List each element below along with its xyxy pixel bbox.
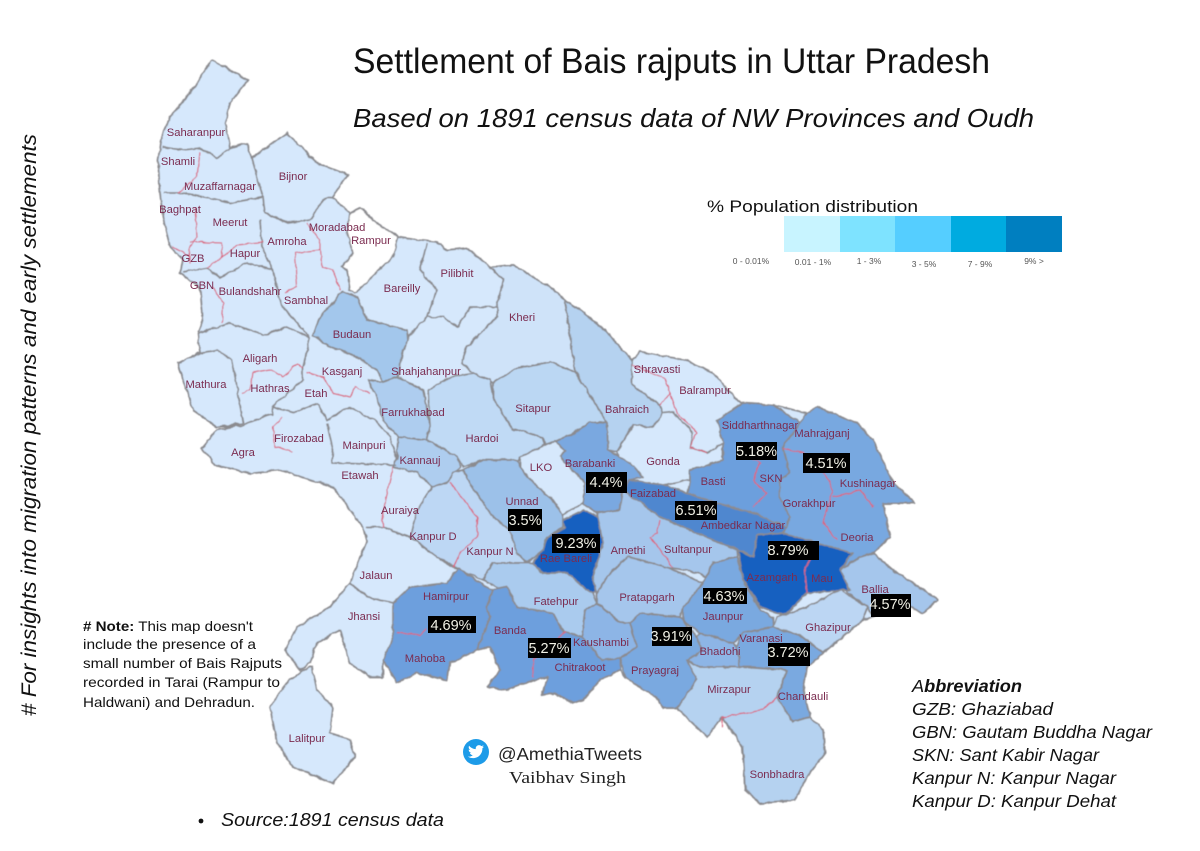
percentage callouts (428, 442, 911, 666)
district name labels: Bhadohi (699, 646, 741, 658)
abbreviation list: Kanpur D: Kanpur Dehat (912, 791, 1117, 811)
district name labels: Balrampur (679, 385, 731, 397)
district name labels: Mau (811, 573, 833, 585)
district name labels: Chitrakoot (554, 662, 606, 674)
district name labels: Gorakhpur (783, 498, 836, 510)
percentage callouts: 5.18% (736, 444, 777, 460)
district name labels: Budaun (333, 329, 371, 341)
percentage callouts: 9.23% (555, 536, 597, 552)
district name labels: Siddharthnagar (722, 420, 799, 432)
district name labels: Fatehpur (534, 596, 579, 608)
subtitle: Based on 1891 census data of NW Provinces and Oudh (353, 103, 1034, 133)
district name labels: GBN (190, 280, 214, 292)
district name labels: Unnad (506, 496, 538, 508)
map note: small number of Bais Rajputs (83, 655, 282, 671)
district name labels: Mahoba (405, 653, 446, 665)
percentage callouts: 3.91% (650, 629, 692, 645)
district name labels: Rae Bareli (540, 553, 592, 565)
author name: Vaibhav Singh (509, 768, 627, 787)
legend swatches (784, 216, 1062, 252)
abbreviation list: SKN: Sant Kabir Nagar (912, 745, 1100, 765)
district name labels: Shahjahanpur (391, 366, 461, 378)
legend labels (733, 256, 1044, 269)
state base: western and light districts (158, 60, 938, 803)
district name labels: Aligarh (243, 353, 277, 365)
title: Settlement of Bais rajputs in Uttar Pradesh (353, 42, 990, 81)
percentage callouts: 5.27% (528, 641, 570, 657)
district name labels: Bijnor (279, 171, 308, 183)
district name labels: Hapur (230, 248, 261, 260)
district name labels: Bahraich (605, 404, 649, 416)
district name labels: Hamirpur (423, 591, 469, 603)
map note: Haldwani) and Dehradun. (83, 694, 255, 710)
legend labels: 1 - 3% (857, 256, 882, 266)
map note: # Note: This map doesn't (83, 618, 253, 634)
district name labels: Sambhal (284, 295, 328, 307)
abbreviation list: Kanpur N: Kanpur Nagar (912, 768, 1117, 788)
district name labels: Kanpur N (466, 546, 514, 558)
district name labels: Deoria (841, 532, 874, 544)
district name labels: Bareilly (384, 283, 421, 295)
district name labels: Kaushambi (573, 637, 629, 649)
percentage callouts: 4.69% (430, 618, 472, 634)
district name labels: Banda (494, 625, 527, 637)
district name labels: Agra (231, 447, 256, 459)
district name labels: GZB (182, 253, 204, 265)
district name labels: Kasganj (322, 366, 362, 378)
district name labels: Chandauli (778, 691, 828, 703)
legend title: % Population distribution (707, 197, 918, 216)
district name labels: Kanpur D (409, 531, 457, 543)
map note: recorded in Tarai (Rampur to (83, 674, 280, 690)
district name labels: Etah (304, 388, 328, 400)
district name labels: Hathras (250, 383, 290, 395)
legend labels: 0 - 0.01% (733, 256, 770, 266)
choropleth map of Uttar Pradesh districts (158, 60, 938, 803)
percentage callouts: 4.63% (703, 589, 745, 605)
map note: include the presence of a (83, 636, 256, 652)
district name labels: Kushinagar (840, 478, 897, 490)
district name labels: Baghpat (159, 204, 202, 216)
district name labels: Sitapur (515, 403, 551, 415)
division boundaries (162, 147, 660, 603)
twitter handle: @AmethiaTweets (498, 744, 642, 764)
district name labels: Jhansi (348, 611, 380, 623)
district name labels: Basti (701, 476, 725, 488)
district name labels: Rampur (351, 235, 391, 247)
abbreviation list (911, 676, 1153, 811)
district name labels: Etawah (341, 470, 379, 482)
district name labels: Amethi (611, 545, 645, 557)
district name labels: Ghazipur (805, 622, 851, 634)
legend labels: 7 - 9% (968, 259, 993, 269)
district name labels: Azamgarh (746, 572, 798, 584)
district name labels: Ambedkar Nagar (701, 520, 786, 532)
district name labels: Lalitpur (289, 733, 326, 745)
percentage callouts: 3.72% (767, 645, 809, 661)
shaded districts (313, 208, 938, 803)
source: Source:1891 census data (221, 809, 444, 830)
percentage callouts: 3.5% (508, 513, 542, 529)
district name labels: Bulandshahr (219, 286, 282, 298)
district name labels: Muzaffarnagar (184, 181, 256, 193)
district name labels: Prayagraj (631, 665, 679, 677)
district name labels: Jalaun (360, 570, 392, 582)
district name labels: Pratapgarh (619, 592, 675, 604)
district name labels: Gonda (646, 456, 681, 468)
percentage callouts: 4.51% (805, 456, 847, 472)
district name labels: Shamli (161, 156, 195, 168)
percentage callouts: 4.57% (869, 597, 911, 613)
legend labels: 3 - 5% (912, 259, 937, 269)
district name labels: SKN (759, 473, 783, 485)
district name labels: Barabanki (565, 458, 615, 470)
percentage callouts: 6.51% (675, 503, 717, 519)
district name labels: Mahrajganj (794, 428, 850, 440)
district name labels: Faizabad (630, 488, 676, 500)
district name labels: Farrukhabad (381, 407, 445, 419)
district name labels: LKO (530, 462, 552, 474)
district name labels: Firozabad (274, 433, 324, 445)
district name labels: Meerut (213, 217, 248, 229)
percentage callouts: 8.79% (767, 543, 809, 559)
icon: twitter bird (463, 739, 489, 765)
district boundaries (172, 152, 873, 727)
map note (83, 618, 282, 710)
legend (707, 197, 1062, 269)
district name labels: Hardoi (466, 433, 498, 445)
district name labels: Mathura (185, 379, 227, 391)
district name labels: Sultanpur (664, 544, 712, 556)
district name labels: Shravasti (634, 364, 680, 376)
district name labels: Sonbhadra (750, 769, 805, 781)
district name labels: Amroha (267, 236, 307, 248)
district name labels: Auraiya (381, 505, 420, 517)
district name labels: Kannauj (399, 455, 441, 467)
abbreviation list: GZB: Ghaziabad (912, 699, 1054, 719)
abbreviation list: Abbreviation (911, 676, 1022, 696)
district name labels: Ballia (861, 584, 889, 596)
district name labels: Jaunpur (703, 611, 743, 623)
legend labels: 0.01 - 1% (795, 257, 832, 267)
legend labels: 9% > (1024, 256, 1044, 266)
district name labels: Pilibhit (441, 268, 474, 280)
district name labels: Mirzapur (707, 684, 751, 696)
district name labels: Mainpuri (343, 440, 385, 452)
percentage callouts: 4.4% (589, 475, 623, 491)
district name labels: Varanasi (739, 633, 783, 645)
district name labels (159, 127, 897, 781)
twitter credit (463, 739, 642, 787)
district name labels: Moradabad (309, 222, 365, 234)
district name labels: Saharanpur (167, 127, 226, 139)
abbreviation list: GBN: Gautam Buddha Nagar (912, 722, 1153, 742)
district name labels: Kheri (509, 312, 535, 324)
vertical side note: # For insights into migration patterns and early settlements (18, 133, 41, 716)
